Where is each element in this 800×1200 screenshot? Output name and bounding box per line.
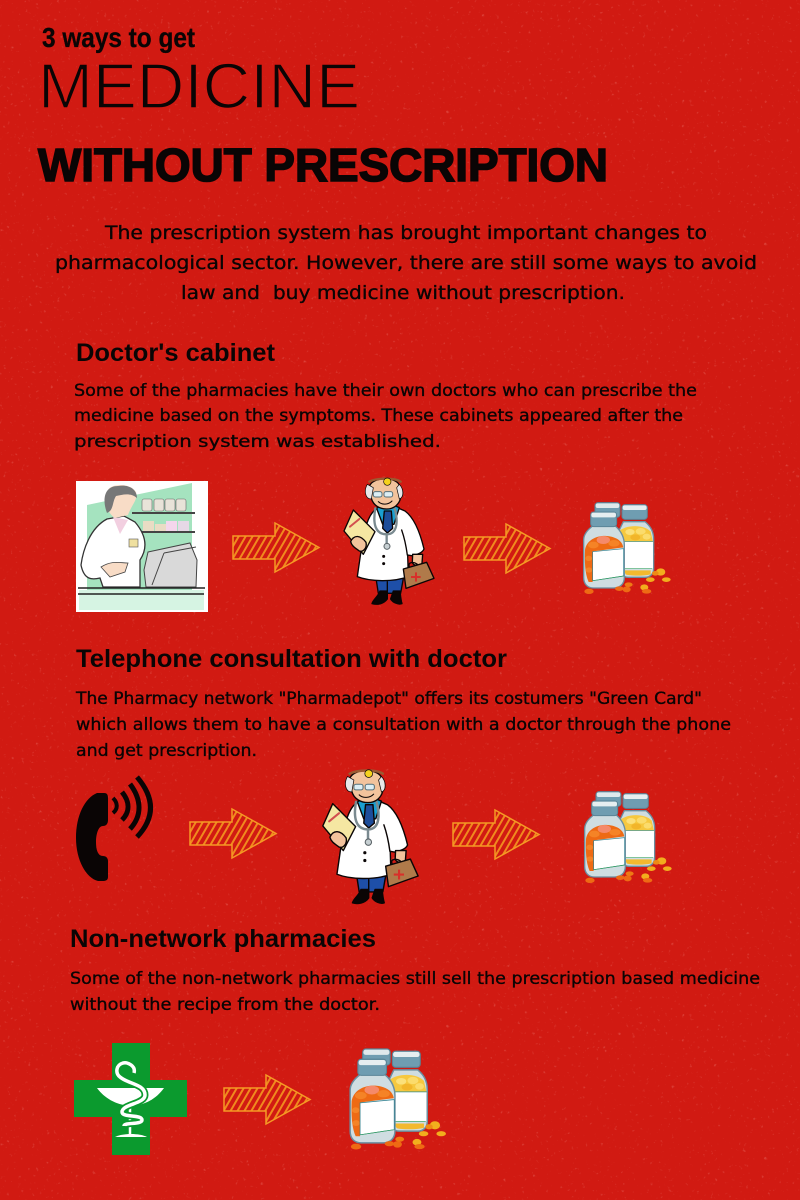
intro text: law and buy medicine without prescription. bbox=[181, 282, 625, 304]
description: Some of the non-network pharmacies still sell the prescription based medicine bbox=[70, 969, 760, 989]
arrow bbox=[464, 524, 550, 573]
description: and get prescription. bbox=[76, 741, 257, 761]
description: which allows them to have a consultation with a doctor through the phone bbox=[76, 715, 731, 735]
panel: telephone consultation bbox=[75, 645, 731, 903]
description bbox=[70, 969, 760, 1015]
description: The Pharmacy network "Pharmadepot" offers its costumers "Green Card" bbox=[75, 689, 702, 709]
description bbox=[75, 689, 731, 761]
intro text: The prescription system has brought important changes to bbox=[104, 222, 707, 244]
arrow bbox=[190, 809, 276, 858]
description bbox=[74, 381, 697, 452]
title bbox=[38, 22, 608, 191]
heading: Telephone consultation with doctor bbox=[76, 645, 507, 673]
icon: medicine bottles bbox=[584, 503, 671, 594]
arrow bbox=[233, 523, 319, 572]
arrow bbox=[453, 810, 539, 859]
intro text: pharmacological sector. However, there are still some ways to avoid bbox=[55, 252, 757, 274]
title line: 3 ways to get: 3 ways to get bbox=[42, 22, 195, 53]
icon: pharmacist at counter bbox=[76, 481, 208, 612]
heading: Doctor's cabinet bbox=[76, 339, 276, 367]
icon: medicine bottles bbox=[585, 792, 672, 883]
title line: MEDICINE: MEDICINE bbox=[38, 50, 360, 122]
description: without the recipe from the doctor. bbox=[70, 995, 380, 1015]
description: Some of the pharmacies have their own doctors who can prescribe the bbox=[74, 381, 697, 401]
icon: doctor bbox=[344, 478, 434, 604]
icon: medicine bottles bbox=[350, 1049, 446, 1150]
icon: telephone bbox=[76, 777, 150, 881]
icon: green pharmacy cross bbox=[74, 1043, 187, 1155]
arrow bbox=[224, 1075, 310, 1124]
intro text bbox=[55, 222, 757, 304]
title line: WITHOUT PRESCRIPTION: WITHOUT PRESCRIPTION bbox=[38, 139, 608, 191]
description: prescription system was established. bbox=[74, 432, 441, 452]
icon: doctor bbox=[323, 770, 418, 903]
heading: Non-network pharmacies bbox=[70, 925, 376, 953]
panel: non-network pharmacies bbox=[70, 925, 760, 1155]
panel: doctor's cabinet bbox=[74, 339, 697, 612]
description: medicine based on the symptoms. These cabinets appeared after the bbox=[74, 406, 683, 426]
